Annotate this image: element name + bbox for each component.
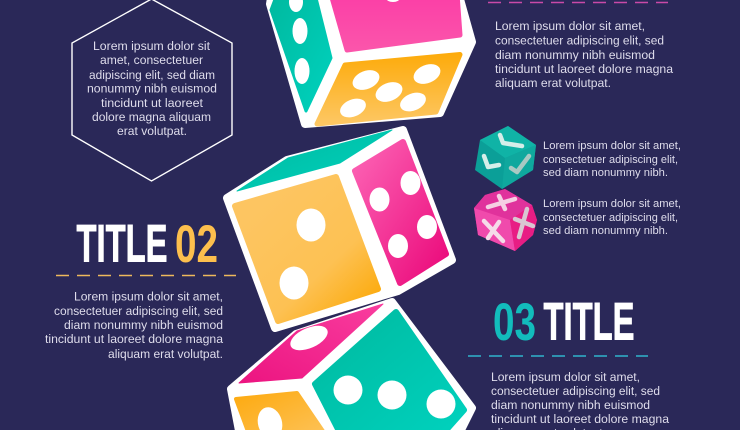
text block: top right: diam nonummy nibh euismod [495,48,655,62]
text block: top right: aliquam erat volutpat. [495,76,611,90]
bottom die pips [254,321,456,430]
bottom die pink face [239,304,383,383]
text block: cross die: consectetuer adipiscing elit, [543,212,678,224]
hexagon callout: tincidunt ut laoreet [101,96,204,110]
text block: top right: Lorem ipsum dolor sit amet, [495,19,645,33]
section: top right [488,2,673,90]
heading: 03 title: 03 [493,293,536,352]
heading: title 02: TITLE [76,214,168,274]
top die pips [289,0,443,121]
bottom die [231,302,472,430]
hexagon callout: nonummy nibh euismod [87,82,217,96]
text block: cross die: Lorem ipsum dolor sit amet, [543,198,681,210]
bottom die yellow face [236,393,327,430]
hexagon callout: erat volutpat. [117,124,187,138]
text block: cross die: sed diam nonummy nibh. [543,225,668,237]
icon: teal check die [475,126,536,189]
hexagon callout: amet, consectetuer [100,53,203,67]
top die pink face [331,0,460,50]
section: title 02 [45,214,236,361]
icon: pink cross die [474,189,537,251]
middle die [227,130,452,328]
middle die teal face [237,130,392,191]
text block: check die: sed diam nonummy nibh. [543,167,668,179]
text block: top right: consectetuer adipiscing elit, sed [495,34,664,48]
hexagon callout: dolore magna aliquam [92,110,211,124]
text block: top right [495,19,673,90]
top die teal face [271,0,331,111]
text block: title 03: consectetuer adipiscing elit, sed [491,384,660,398]
text block: cross die [543,198,681,237]
middle die yellow face [235,177,378,321]
hexagon callout: adipiscing elit, sed diam [89,68,215,82]
middle die pink face [355,142,446,283]
text block: title 03: diam nonummy nibh euismod [491,398,650,412]
heading: 03 title: TITLE [544,292,634,352]
bottom die teal face [315,312,464,430]
text block: top right: tincidunt ut laoreet dolore magna [495,62,673,76]
text block: title 03 [491,370,669,430]
heading: 03 title [493,292,634,352]
text block: title 02: consectetuer adipiscing elit, sed [54,304,223,318]
heading: title 02: 02 [175,215,218,274]
text block: check die [543,140,681,179]
hexagon callout [72,0,232,181]
text block: title 02: Lorem ipsum dolor sit amet, [74,290,223,304]
middle die pips [280,171,437,300]
text block: title 03: tincidunt ut laoreet dolore magna [491,412,669,426]
text block: title 02: aliquam erat volutpat. [108,347,223,361]
top die [270,0,472,124]
text block: check die: Lorem ipsum dolor sit amet, [543,140,681,152]
text block: title 03: Lorem ipsum dolor sit amet, [491,370,640,384]
hexagon callout: Lorem ipsum dolor sit [93,39,211,53]
text block: title 02: tincidunt ut laoreet dolore magna [45,332,223,346]
top die yellow face [317,54,460,124]
text block: title 02 [45,290,223,361]
section: title 03 [468,292,669,430]
text block: title 02: diam nonummy nibh euismod [64,318,223,332]
text block: check die: consectetuer adipiscing elit, [543,154,678,166]
